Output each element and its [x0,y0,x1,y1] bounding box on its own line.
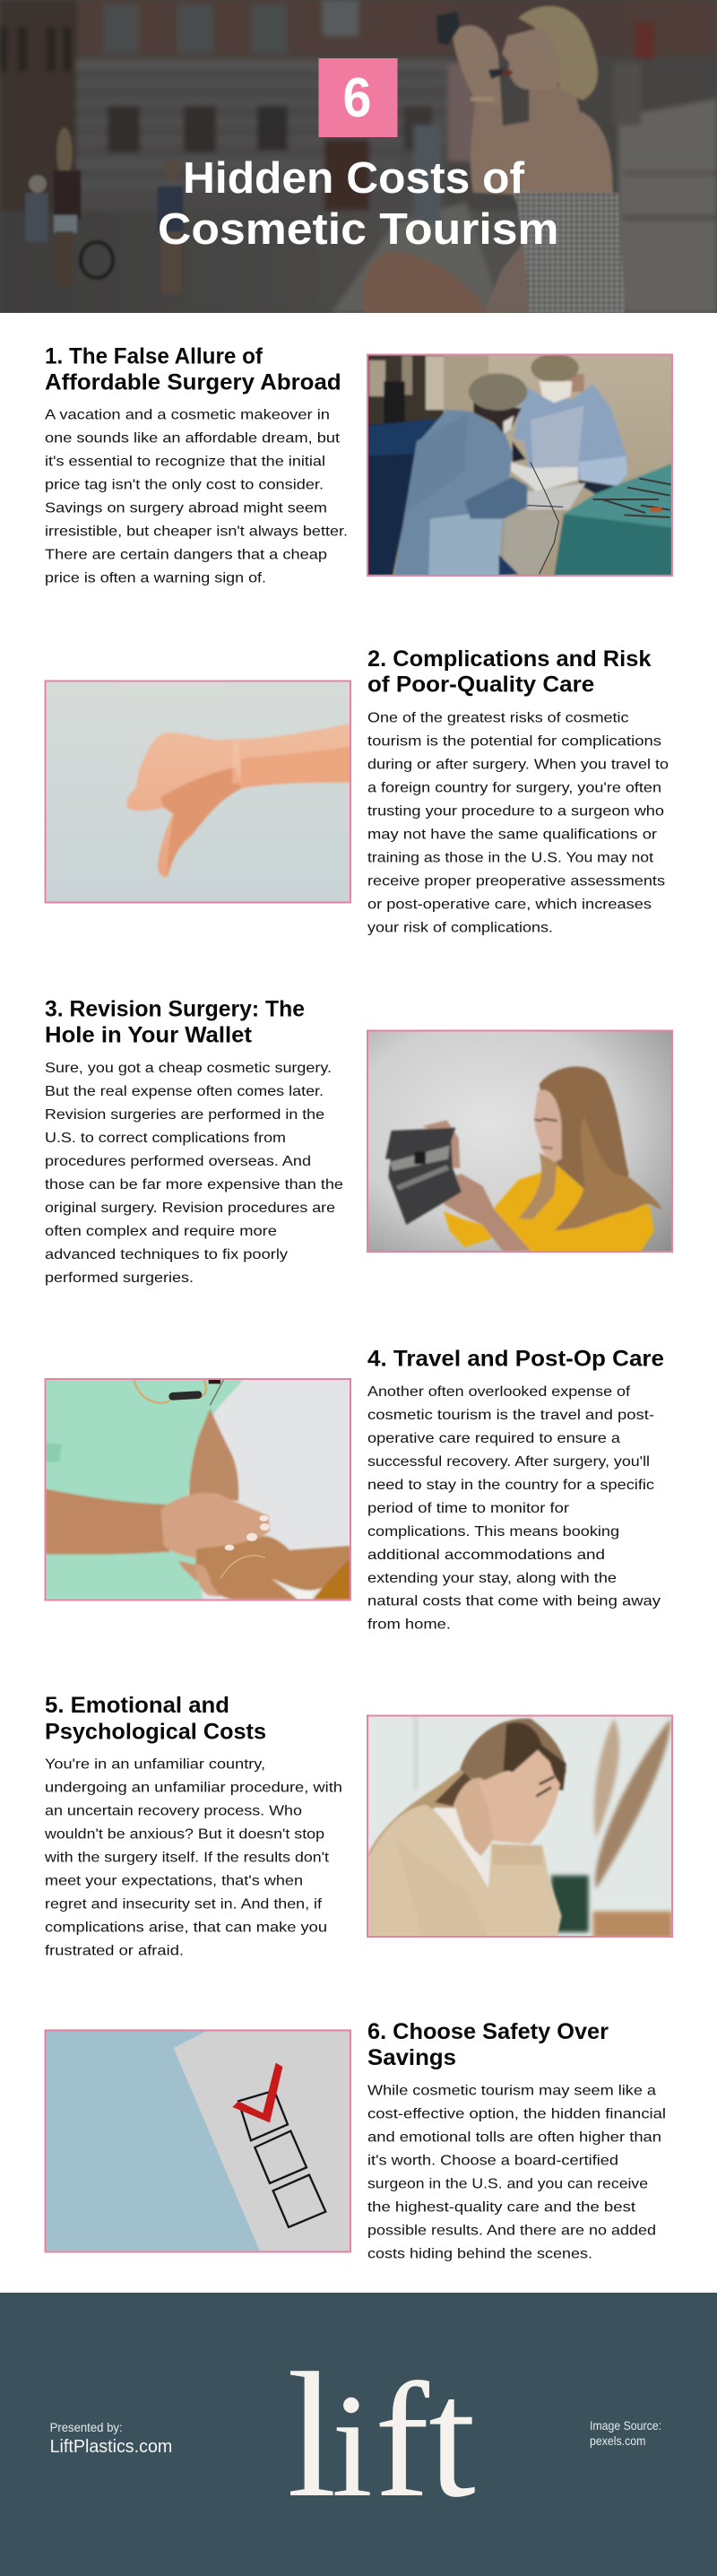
heading 2 [367,646,652,698]
image source: pexels.com [590,2433,645,2448]
lift logo: i [332,2364,373,2528]
front hair [518,1153,557,1219]
heading 4: 4. Travel and Post-Op Care [367,1347,664,1372]
number badge: 6 [342,67,371,129]
body text 6: it's worth. Choose a board-certified [367,2154,618,2169]
body text 4: operative care required to ensure a [367,1431,620,1446]
teal table [554,513,671,575]
body text 2: a foreign country for surgery, you're often [367,780,661,796]
panel: section 3 [45,996,677,1286]
heading 6 [367,2019,609,2070]
heading 1: Affordable Surgery Abroad [45,369,341,395]
hands [478,1750,560,1844]
body text 2 [367,710,669,936]
body text 4: natural costs that come with being away [367,1594,661,1609]
body text 5: You're in an unfamiliar country, [45,1756,265,1772]
body text 1: A vacation and a cosmetic makeover in [45,408,330,423]
right surgeon head [569,374,584,392]
gloves and drape [511,462,578,492]
title [158,154,559,254]
body text 4: extending your stay, along with the [367,1571,617,1586]
panel: section 6 [41,2019,666,2261]
wallet [385,1128,462,1225]
neck and upper body [529,85,583,126]
sweater [367,1805,562,1937]
body text 4: cosmetic tourism is the travel and post- [367,1408,654,1423]
body text 3: Sure, you got a cheap cosmetic surgery. [45,1061,332,1076]
body text 3: original surgery. Revision procedures are [45,1201,335,1216]
header banner [0,0,717,313]
body text 5: wouldn't be anxious? But it doesn't stop [44,1826,324,1842]
photo border 2 [45,681,350,902]
body text 5: frustrated or afraid. [45,1943,184,1958]
heading 5 [45,1693,266,1744]
body text 6: costs hiding behind the scenes. [367,2246,592,2261]
body text 6: possible results. And there are no added [367,2224,656,2239]
back hair [540,1067,629,1195]
presented by: Presented by: [50,2420,123,2434]
body text 4: from home. [367,1617,451,1632]
body text 3: procedures performed overseas. And [45,1154,311,1169]
hands [435,1174,531,1252]
body text 5: complications arise, that can make you [45,1920,327,1935]
heading 3: 3. Revision Surgery: The [45,996,305,1021]
heading 2: of Poor-Quality Care [367,672,594,698]
hair [460,1719,566,1791]
image source: Image Source: [590,2418,661,2433]
body text 5: with the surgery itself. If the results don't [44,1850,330,1865]
woman [362,251,488,313]
instruments [593,479,670,517]
image source [590,2418,661,2448]
heading 6: Savings [367,2045,456,2070]
heading 5: 5. Emotional and [45,1693,229,1718]
photo: surgeons operating [363,351,677,579]
body text 6: While cosmetic tourism may seem like a [367,2084,656,2099]
left surgeon head [473,403,522,434]
face [534,1090,562,1162]
photo: nurse holding patient's hand [41,1375,355,1603]
lift logo: t [428,2345,476,2533]
body text 1: price is often a warning sign of. [45,571,266,586]
panel: section 1 [45,344,677,586]
neck and tee [453,1778,495,1856]
body text 5: undergoing an unfamiliar procedure, with [45,1780,342,1795]
photo border 4 [45,1379,350,1600]
body text 6: cost-effective option, the hidden financial [367,2107,666,2122]
body text 4: Another often overlooked expense of [367,1384,631,1400]
body text 3: But the real expense often comes later. [45,1084,324,1099]
background figures [29,175,47,193]
heading 2: 2. Complications and Risk [367,646,652,672]
body text 3: Revision surgeries are performed in the [45,1107,324,1123]
body text 1 [45,408,348,586]
title: Cosmetic Tourism [158,205,559,254]
panel: section 2 [41,646,669,936]
number badge [319,58,398,137]
photo border 3 [367,1031,672,1252]
footer band [0,2293,717,2576]
body text 2: trusting your procedure to a surgeon who [367,803,664,820]
body text 5 [44,1756,342,1958]
body text 3 [45,1061,343,1286]
lift logo: f [375,2349,429,2531]
heading 1: 1. The False Allure of [45,344,263,369]
heading 3 [45,996,305,1047]
body text 4: period of time to monitor for [367,1501,570,1516]
body text 5: an uncertain recovery process. Who [45,1803,302,1818]
heading 6: 6. Choose Safety Over [367,2019,609,2044]
body text 4 [367,1384,661,1632]
heading 1 [45,344,341,395]
photo: distressed woman holding her face [363,1713,677,1940]
body text 1: irresistible, but cheaper isn't always better. [45,525,348,540]
body text 1: one sounds like an affordable dream, but [45,431,341,447]
panel: section 4 [41,1347,664,1632]
photo border 5 [367,1716,672,1937]
body text 1: Savings on surgery abroad might seem [45,501,327,516]
body text 2: tourism is the potential for complications [367,733,661,750]
panel: section 5 [44,1693,677,1958]
body text 1: it's essential to recognize that the initial [45,455,325,470]
left surgeon gown [394,410,527,576]
body text 4: additional accommodations and [367,1548,605,1563]
body text 6: surgeon in the U.S. and you can receive [367,2177,648,2192]
lift logo: l [287,2337,337,2535]
photo border 6 [45,2030,350,2252]
body text 4: need to stay in the country for a specific [367,1478,654,1493]
body text 6: the highest-quality care and the best [367,2200,636,2216]
body text 5: regret and insecurity set in. And then, if [45,1896,323,1912]
body text 5: meet your expectations, that's when [45,1873,303,1888]
body text 3: U.S. to correct complications from [45,1131,286,1146]
photo: woman looking at empty wallet [363,1028,677,1255]
presented by: LiftPlastics.com [50,2437,172,2457]
body text 2: receive proper preoperative assessments [367,873,665,889]
body text 1: There are certain dangers that a cheap [45,548,327,563]
ponytail [367,1766,482,1856]
photo border 1 [367,355,672,576]
body text 3: performed surgeries. [45,1271,194,1286]
heading 3: Hole in Your Wallet [45,1022,253,1047]
photo: thumbs down hand [41,678,355,906]
body text 4: complications. This means booking [367,1524,619,1540]
body text 4: successful recovery. After surgery, you'll [367,1454,650,1470]
body text 3: often complex and require more [45,1224,277,1239]
body text 2: or post-operative care, which increases [367,897,652,913]
body text 3: advanced techniques to fix poorly [45,1247,288,1262]
header photo: woman applying lipstick [0,0,717,313]
title: Hidden Costs of [183,154,525,203]
body text 2: may not have the same qualifications or [367,827,658,843]
right surgeon gown [514,385,627,486]
body text 2: during or after surgery. When you travel to [367,757,669,773]
sweater [444,1165,654,1252]
photo: checklist with red tick [41,2026,355,2254]
body text 1: price tag isn't the only cost to consider. [45,478,324,493]
lift logo [287,2337,476,2535]
hair [518,5,598,100]
body text 2: training as those in the U.S. You may not [367,850,654,866]
heading 5: Psychological Costs [45,1719,266,1744]
body text 6: and emotional tolls are often higher than [367,2130,661,2146]
body text 2: your risk of complications. [367,920,553,936]
presented by [50,2420,172,2457]
body text 2: One of the greatest risks of cosmetic [367,710,629,726]
body text 3: those can be far more expensive than the [45,1177,343,1193]
body text 6 [367,2084,666,2261]
